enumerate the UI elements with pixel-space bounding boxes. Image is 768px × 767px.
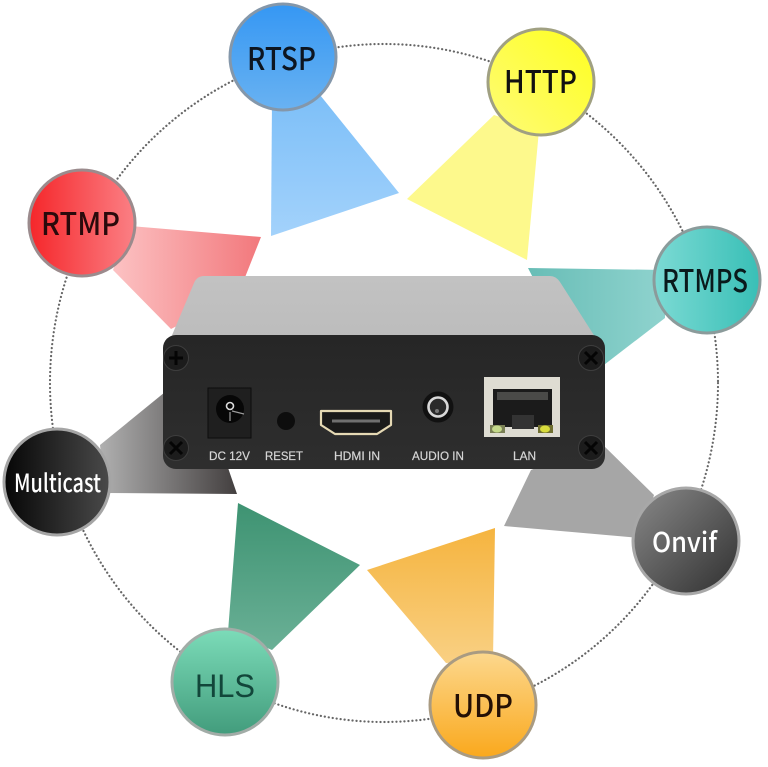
- port label: DC 12V: DC 12V: [209, 449, 250, 463]
- beam: Onvif: [504, 442, 654, 538]
- LAN port: [484, 377, 560, 437]
- node: RTMP: [29, 170, 135, 276]
- node: RTSP: [230, 4, 336, 110]
- device: encoder box: [163, 276, 605, 469]
- device front panel: [163, 335, 605, 469]
- node: UDP: [430, 652, 536, 758]
- beam: HTTP: [407, 115, 539, 260]
- beam: RTMPS: [528, 268, 665, 368]
- beam: Multicast: [100, 388, 237, 494]
- node: Onvif: [633, 488, 739, 594]
- screw: bottom left: [164, 436, 188, 460]
- node: RTMPS: RTMPS: [662, 256, 748, 301]
- node: Multicast: [4, 429, 110, 535]
- node: Onvif: Onvif: [652, 521, 719, 560]
- node: RTMPS: [654, 227, 760, 333]
- port label: LAN: LAN: [513, 449, 536, 463]
- HDMI port: [321, 411, 391, 434]
- screw: top left: [164, 346, 188, 370]
- beam: RTSP: [271, 95, 399, 236]
- screw: bottom right: [578, 436, 604, 460]
- audio jack: [422, 392, 454, 422]
- port label: RESET: RESET: [265, 449, 304, 463]
- screw: top right: [578, 346, 604, 370]
- node: RTSP: RTSP: [247, 34, 316, 79]
- port label: HDMI IN: HDMI IN: [334, 449, 380, 463]
- device top surface: [170, 276, 597, 340]
- dotted ring connecting protocols: [50, 44, 718, 722]
- beam: HLS: [228, 503, 360, 650]
- node: RTMP: RTMP: [41, 199, 120, 244]
- port label: AUDIO IN: AUDIO IN: [412, 449, 464, 463]
- node: Multicast: Multicast: [14, 464, 101, 500]
- node: HLS: HLS: [195, 668, 255, 704]
- node: HLS: [172, 629, 278, 735]
- beam: RTMP: [113, 226, 261, 329]
- node: UDP: UDP: [453, 681, 513, 726]
- node: HTTP: HTTP: [504, 57, 577, 102]
- beam: UDP: [367, 528, 495, 663]
- reset button: [277, 412, 295, 430]
- DC 12V power jack: [208, 388, 251, 438]
- node: HTTP: [488, 29, 594, 135]
